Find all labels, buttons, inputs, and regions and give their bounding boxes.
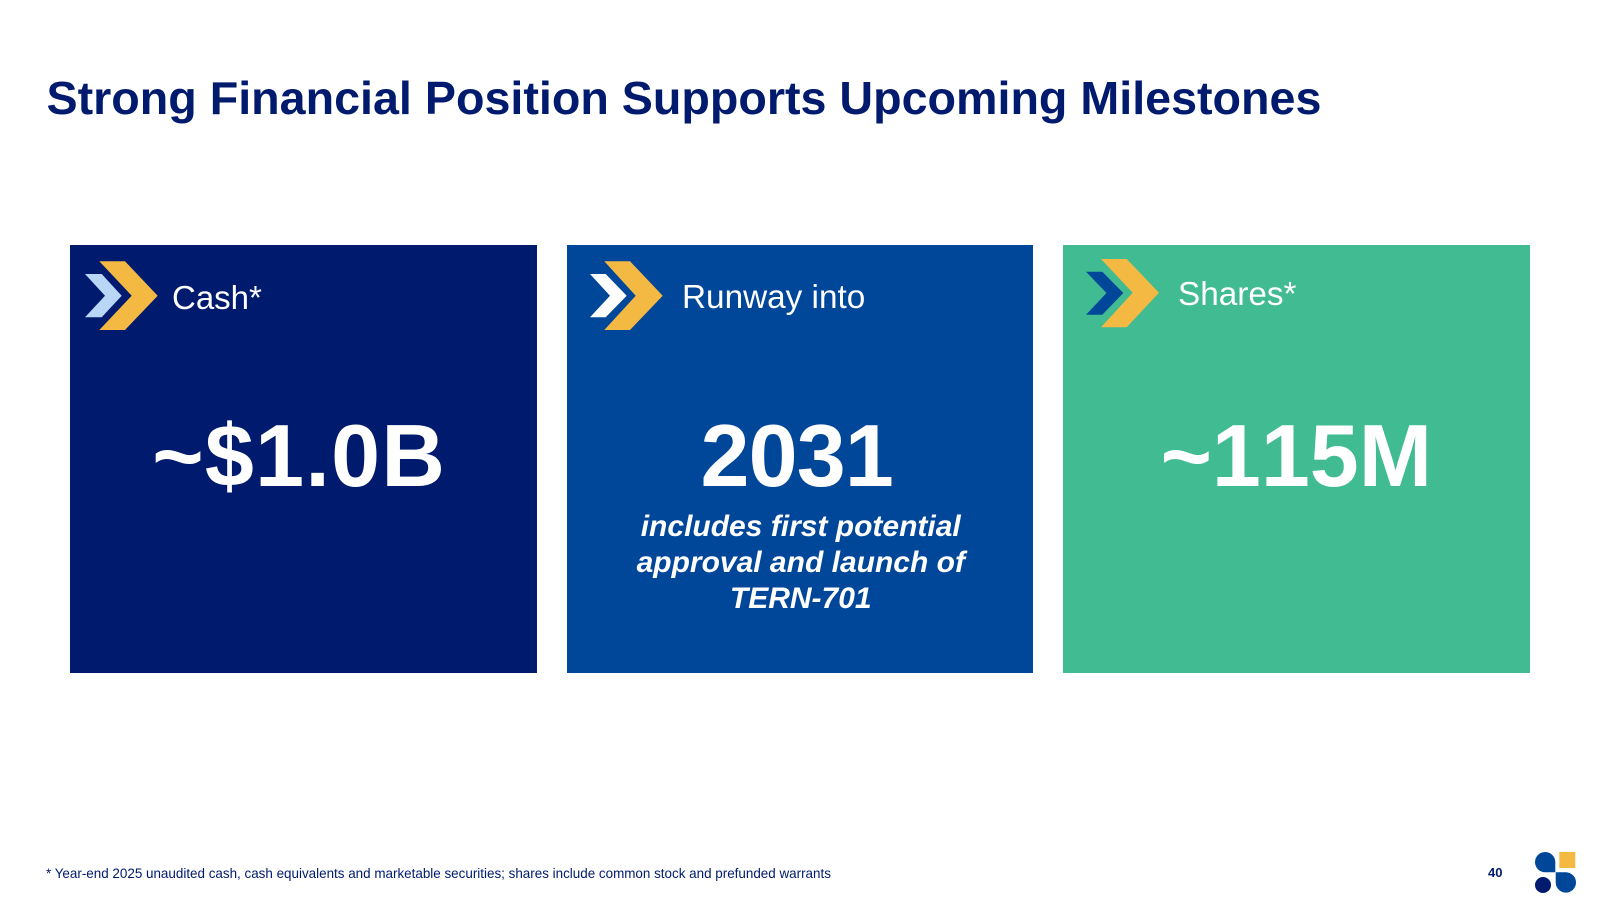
panel: runway <box>566 245 1033 673</box>
title: Strong Financial Position Supports Upcoming Milestones <box>46 72 1321 124</box>
note: runway detail <box>636 510 968 615</box>
value: runway year: 2031 <box>700 406 893 505</box>
note: runway detail: includes first potential <box>641 510 961 543</box>
value: cash amount: ~$1.0B <box>152 406 446 505</box>
icon: runway chevrons <box>590 261 663 330</box>
heading: runway: Runway into <box>682 278 865 316</box>
icon: company logo <box>1535 852 1576 893</box>
icon: cash chevrons <box>85 261 158 330</box>
footnote: * Year-end 2025 unaudited cash, cash equivalents and marketable securities; shares include common stock and prefunded warrants <box>46 866 831 881</box>
panel: cash <box>70 245 536 673</box>
icon: shares chevrons <box>1086 259 1159 328</box>
page number: 40 <box>1488 865 1502 880</box>
heading: cash: Cash* <box>172 278 262 316</box>
note: runway detail: approval and launch of <box>637 546 965 579</box>
value: share count: ~115M <box>1160 406 1432 505</box>
heading: shares: Shares* <box>1178 276 1296 313</box>
note: runway detail: TERN-701 <box>730 582 872 615</box>
panel: shares <box>1063 245 1530 673</box>
